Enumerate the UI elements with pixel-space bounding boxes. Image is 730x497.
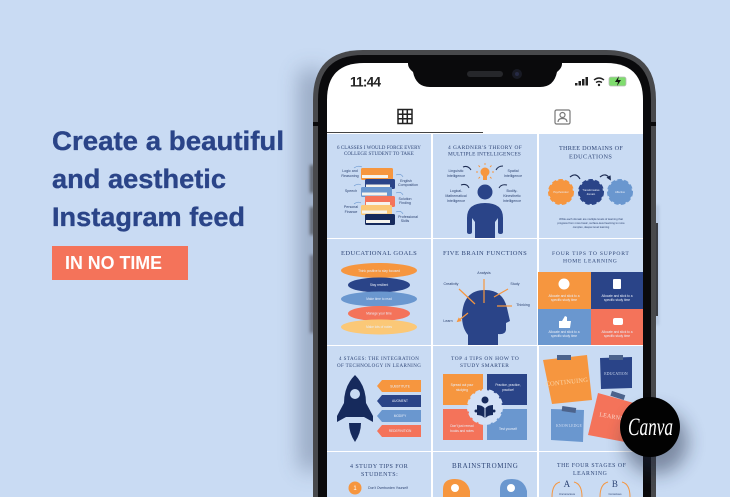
tile 1 books: Skills (401, 219, 409, 223)
tile 1 books: Composition (398, 183, 418, 187)
tile 9 notes: KNOWLEDGE (556, 424, 583, 428)
tile 1 books: Speech (345, 189, 357, 193)
tile 11 brainstorming (433, 452, 537, 497)
tile 4 goals: Make lots of notes (366, 325, 392, 329)
tile 8 study: TOP 4 TIPS ON HOW TO (451, 356, 519, 362)
tile 4 goals: Make time to read (366, 297, 392, 301)
book stack (361, 168, 395, 225)
tile 4 goals: Think positive to stay focused (358, 269, 400, 273)
tile 12 stages: B (612, 479, 618, 489)
tile 5 brain: Analysis (477, 271, 491, 275)
tile 3 domains: complex, deeper-level learning (573, 225, 610, 229)
headline: and aesthetic (52, 164, 226, 194)
tile 10 tips: 1 (353, 486, 357, 492)
tile 3 domains: THREE DOMAINS OF (559, 145, 623, 152)
phone shadow (300, 70, 659, 470)
badge: in no time: IN NO TIME (65, 253, 162, 273)
headline (52, 126, 284, 232)
tile 6 tips (538, 239, 643, 345)
tile 2 person: Bodily- (506, 189, 518, 193)
tile 6 tips: Allocate and stick to a (548, 330, 580, 334)
tile 1 books: COLLEGE STUDENT TO TAKE (344, 152, 414, 157)
tab underline (327, 132, 483, 133)
tile 12 stages (539, 452, 643, 497)
tile 5 brain: Study (510, 282, 520, 286)
tile 9 notes: EDUCATION (604, 372, 628, 376)
tile 8 study: STUDY SMARTER (460, 363, 509, 369)
tile 1 books: Finding (399, 201, 411, 205)
tile 1 books: Professional (398, 215, 418, 219)
tile 3 domains: progress from more basic, surface-level learning to more (557, 221, 625, 225)
tile 3 domains: EDUCATIONS (569, 154, 612, 160)
tile 8 study: Test yourself (499, 427, 517, 431)
tile 6 tips: Allocate and stick to a (548, 294, 580, 298)
tile 7 rocket: REDEFINITION (389, 429, 412, 433)
tile 1 books: 6 CLASSES I WOULD FORCE EVERY (337, 146, 421, 151)
tile 2 person: Intelligence (503, 199, 521, 203)
tile 7 rocket: AUGMENT (392, 399, 408, 403)
tile 1 books: Personal (344, 205, 358, 209)
tile 12 stages: Conscious (608, 492, 622, 496)
notch (408, 63, 562, 87)
tile 1 books: Solution (398, 197, 412, 201)
tile 8 study: Spread out your (451, 383, 474, 387)
tile 5 brain: FIVE BRAIN FUNCTIONS (443, 250, 527, 257)
tile 3 domains: Affective (615, 190, 626, 194)
tile 10 tips: Don't Overburden Yourself (368, 486, 408, 490)
badge: canva logo: Canva (628, 414, 673, 441)
tile 1 books: Logic and (342, 169, 358, 173)
tile 2 person: Intelligence (504, 174, 522, 178)
tile 2 person: Intelligence (447, 174, 465, 178)
tile 6 tips: specific study time (551, 334, 577, 338)
domain badges (549, 180, 632, 204)
tile 10 tips: STUDENTS: (361, 472, 398, 478)
canva shadow (624, 410, 688, 474)
tile 7 rocket (327, 346, 431, 451)
tile 2 person: Intelligence (447, 199, 465, 203)
tile 7 rocket: MODIFY (394, 414, 407, 418)
tile 1 books: Reasoning (341, 174, 359, 178)
tile 5 brain: Learn (443, 319, 453, 323)
tab: tagged icon (555, 110, 570, 124)
arrows (458, 279, 512, 321)
tile 12 stages: A (564, 479, 571, 489)
tile 3 domains: domain (587, 192, 596, 196)
rocket (337, 375, 373, 442)
tile 4 goals: Stay resilient (370, 283, 388, 287)
tile 10 tips (327, 452, 431, 497)
headline: Create a beautiful (52, 126, 284, 156)
tile 2 person: Spatial (508, 169, 519, 173)
headline: Instagram feed (52, 202, 245, 232)
tile 7 rocket: 4 STAGES: THE INTEGRATION (339, 357, 419, 362)
stage arrows (377, 380, 421, 392)
tile 12 stages: THE FOUR STAGES OF (557, 463, 627, 469)
tab: grid icon (398, 110, 412, 124)
feed background (327, 134, 643, 497)
tile 7 rocket: OF TECHNOLOGY IN LEARNING (337, 364, 421, 369)
tile 6 tips: Allocate and stick to a (601, 330, 633, 334)
tile 6 tips: FOUR TIPS TO SUPPORT (552, 251, 629, 257)
tile 6 tips: Allocate and stick to a (601, 294, 633, 298)
tile 4 goals: Manage your time (366, 312, 392, 316)
tile 10 tips: 4 STUDY TIPS FOR (350, 464, 408, 470)
tile 7 rocket: SUBSTITUTE (390, 384, 410, 388)
reader icon (474, 396, 496, 418)
tile 9 notes: CONTINUING (545, 377, 589, 388)
tile 11 brainstorming: BRAINSTROMING (452, 462, 518, 470)
tile 5 brain (433, 239, 537, 345)
tile 3 domains (539, 134, 643, 238)
tile 8 study: Practice, practice, (495, 383, 521, 387)
status time: 11:44 (350, 74, 381, 90)
tile 8 study: practice! (502, 388, 514, 392)
screen (327, 60, 643, 497)
tile 9 notes: LEARNING (599, 412, 632, 424)
tile 6 tips: specific study time (604, 298, 630, 302)
tile 2 person: Logical- (450, 189, 463, 193)
tile 3 domains: Psychomotor (553, 190, 569, 194)
tile 2 person: Mathematical (445, 194, 467, 198)
phone body (310, 50, 658, 497)
tile 6 tips: specific study time (604, 334, 630, 338)
tile 2 person: 4 GARDNER'S THEORY OF (448, 145, 522, 151)
tile 3 domains: While each domain are multiple levels of learning that (559, 217, 623, 221)
tile 8 study: studying (456, 388, 468, 392)
bulb (476, 163, 494, 180)
tile 12 stages: LEARNING (573, 471, 607, 477)
tile 2 person: Kinesthetic (503, 194, 521, 198)
person (467, 184, 503, 238)
tile 8 study (433, 346, 537, 451)
head silhouette (462, 290, 510, 345)
tile 4 goals (327, 239, 431, 345)
tile 12 stages: Unconscious (559, 492, 576, 496)
tile 6 tips: specific study time (551, 298, 577, 302)
badge: canva logo (620, 397, 680, 457)
tile 3 domains: Transformative (582, 188, 600, 192)
tile 4 goals: EDUCATIONAL GOALS (341, 250, 417, 257)
tile 2 person: MULTIPLE INTELLIGENCES (448, 152, 521, 158)
tile 8 study: Don't just reread (450, 424, 474, 428)
tile 2 person: Linguistic (449, 169, 464, 173)
tile 1 books: Finance (345, 210, 357, 214)
tile 5 brain: Creativity (444, 282, 459, 286)
badge: in no time (52, 246, 188, 280)
tile 6 tips: HOME LEARNING (563, 258, 617, 264)
tile 8 study: books and notes (450, 429, 474, 433)
tile 5 brain: Thinking (516, 303, 530, 307)
tile 1 books: English (400, 179, 412, 183)
tile 2 person (433, 134, 537, 238)
phone (310, 50, 658, 497)
tile 9 notes (539, 346, 643, 451)
status icons (575, 76, 626, 86)
tile 1 books (327, 134, 431, 238)
